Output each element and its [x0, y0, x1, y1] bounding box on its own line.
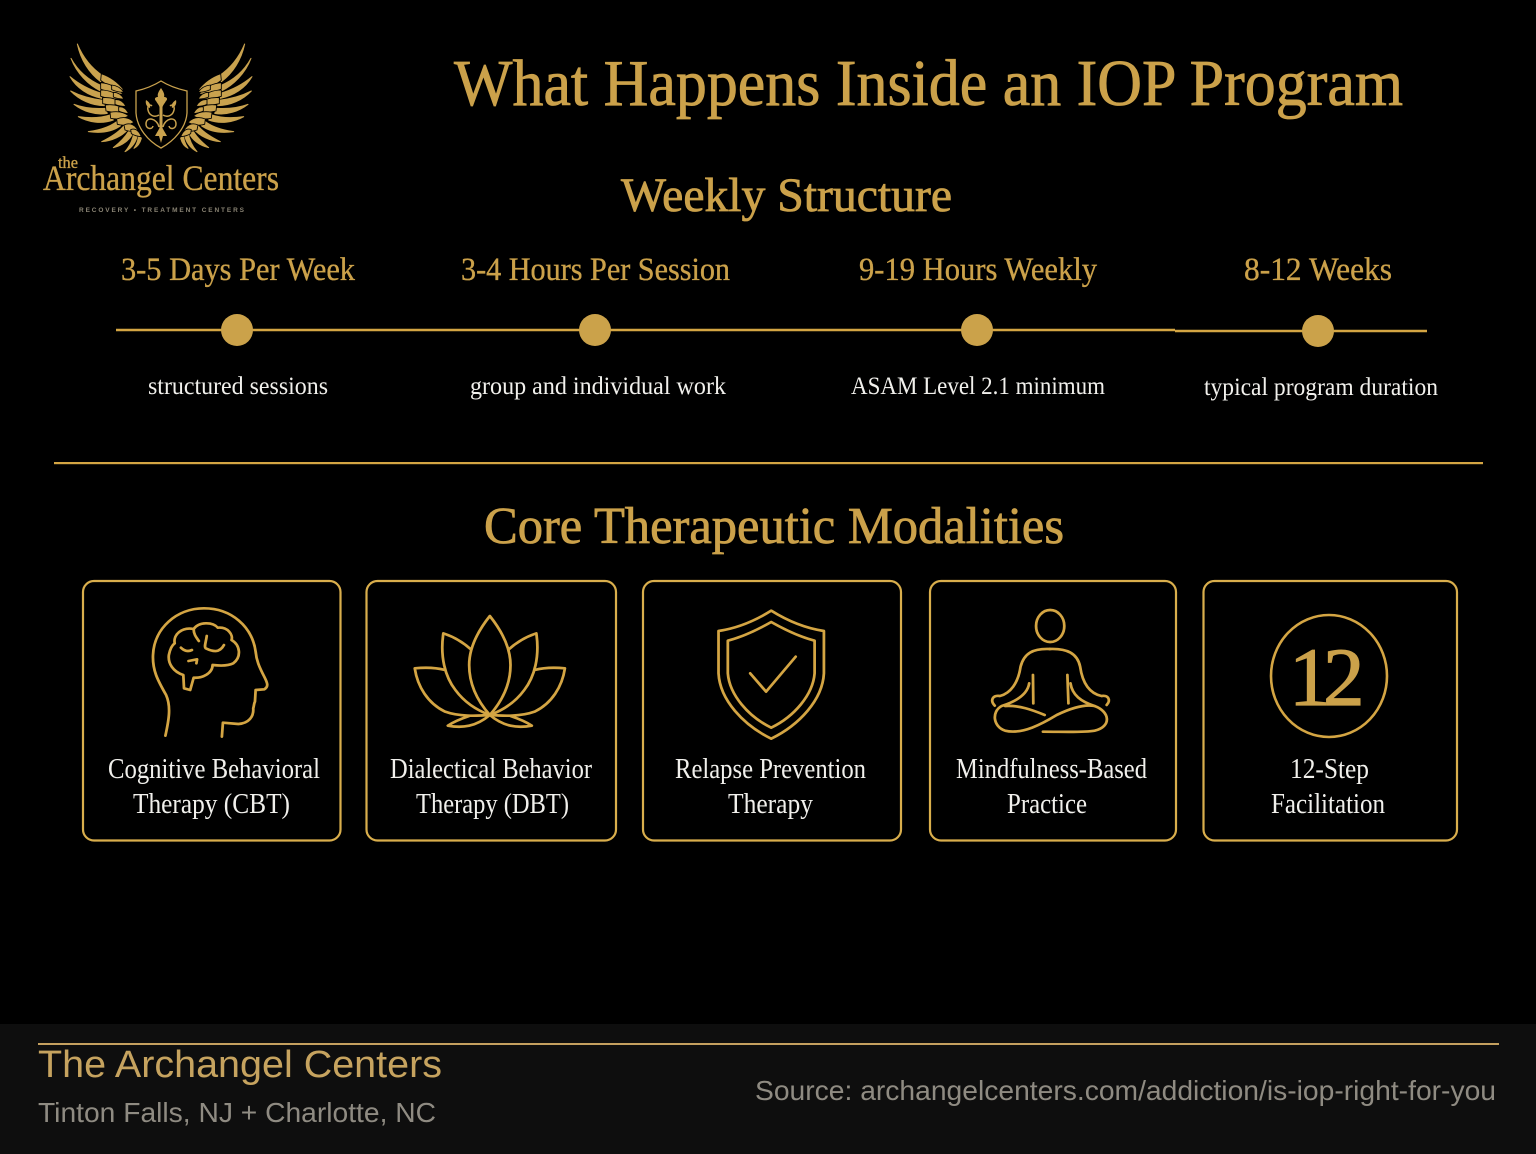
timeline item: days per week: 3-5 Days Per Week: [121, 252, 355, 288]
timeline item: hours weekly: 9-19 Hours Weekly: [859, 252, 1097, 288]
timeline item: program length: typical program duration: [1204, 374, 1438, 401]
label: DBT: Dialectical Behavior: [390, 754, 593, 785]
label: relapse prevention: Relapse Prevention: [675, 754, 866, 785]
icon: right wing: [181, 44, 252, 152]
logo: The Archangel Centers: [43, 44, 279, 214]
logo word: Archangel Centers: Archangel Centers: [43, 158, 279, 198]
footer: locations: Tinton Falls, NJ + Charlotte, NC: [38, 1097, 436, 1128]
heading: core therapeutic modalities: Core Therapeutic Modalities: [484, 498, 1064, 555]
section: weekly structure: [116, 169, 1438, 401]
section: core therapeutic modalities: [83, 498, 1457, 840]
icon: shield with check: [719, 611, 824, 739]
label: 12-step: Facilitation: [1271, 789, 1385, 820]
heading: weekly structure: Weekly Structure: [621, 169, 952, 222]
timeline item: hours per session: [461, 252, 730, 400]
timeline item: days per week: [121, 252, 355, 400]
label: mindfulness: Practice: [1007, 789, 1087, 820]
icon: crest shield: [136, 81, 187, 148]
label: CBT: Therapy (CBT): [133, 789, 290, 820]
timeline item: program length: [1204, 252, 1438, 401]
panel: DBT: [366, 581, 616, 840]
icon: head with brain: [153, 608, 267, 737]
timeline line: [116, 330, 1427, 331]
label: mindfulness: Mindfulness-Based: [956, 754, 1147, 785]
footer: [0, 1024, 1536, 1154]
panel: CBT: [83, 581, 340, 840]
icon: lotus: [415, 616, 565, 727]
label: CBT: Cognitive Behavioral: [108, 754, 320, 785]
section divider: [54, 462, 1483, 464]
label: DBT: Therapy (DBT): [416, 789, 569, 820]
icon: circled 12: 12: [1289, 631, 1364, 723]
icon: left wing: [70, 44, 141, 152]
logo tagline: RECOVERY • TREATMENT CENTERS: [79, 207, 245, 214]
panel: relapse prevention: [643, 581, 901, 840]
footer: organization name: The Archangel Centers: [38, 1044, 442, 1086]
timeline item: hours per session: 3-4 Hours Per Session: [461, 252, 730, 288]
icon: circled 12: [1271, 615, 1387, 737]
title: What Happens Inside an IOP Program: [454, 47, 1403, 120]
timeline item: days per week: structured sessions: [148, 373, 328, 400]
icon: meditating figure: [992, 610, 1109, 732]
panel: 12-step: [1204, 581, 1457, 840]
label: relapse prevention: Therapy: [728, 789, 813, 820]
logo word: the: the: [58, 153, 78, 172]
label: 12-step: 12-Step: [1290, 754, 1369, 785]
panel: mindfulness: [930, 581, 1176, 840]
timeline item: program length: 8-12 Weeks: [1244, 252, 1392, 288]
timeline item: hours weekly: ASAM Level 2.1 minimum: [851, 373, 1105, 400]
footer: source: Source: archangelcenters.com/addiction/is-iop-right-for-you: [755, 1075, 1496, 1106]
timeline item: hours weekly: [851, 252, 1105, 400]
timeline item: hours per session: group and individual work: [470, 373, 726, 400]
